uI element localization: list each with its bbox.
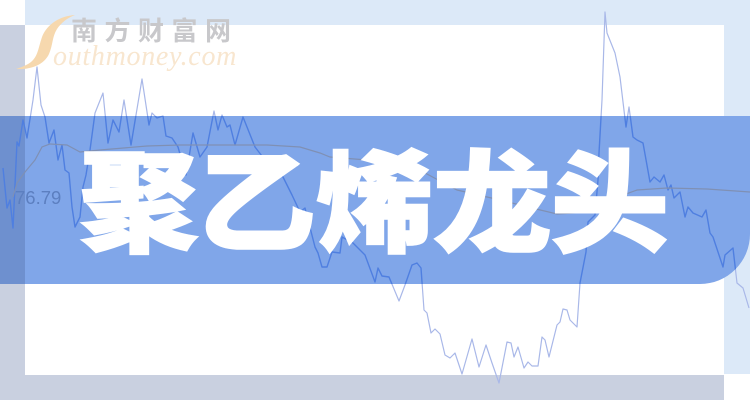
axis label: 76.79: 76.79 — [15, 187, 61, 208]
logo text: Chinese name: 南方财富网 — [71, 16, 239, 46]
logo text: domain: outhmoney.com — [53, 41, 237, 72]
chart: price line over band — [2, 116, 736, 284]
logo: southmoney watermark — [16, 15, 239, 72]
panel: blue title band — [0, 116, 750, 284]
icon: logo swoosh — [16, 15, 75, 69]
chart: moving average line — [13, 144, 750, 214]
title: 聚乙烯龙头 — [80, 145, 669, 267]
